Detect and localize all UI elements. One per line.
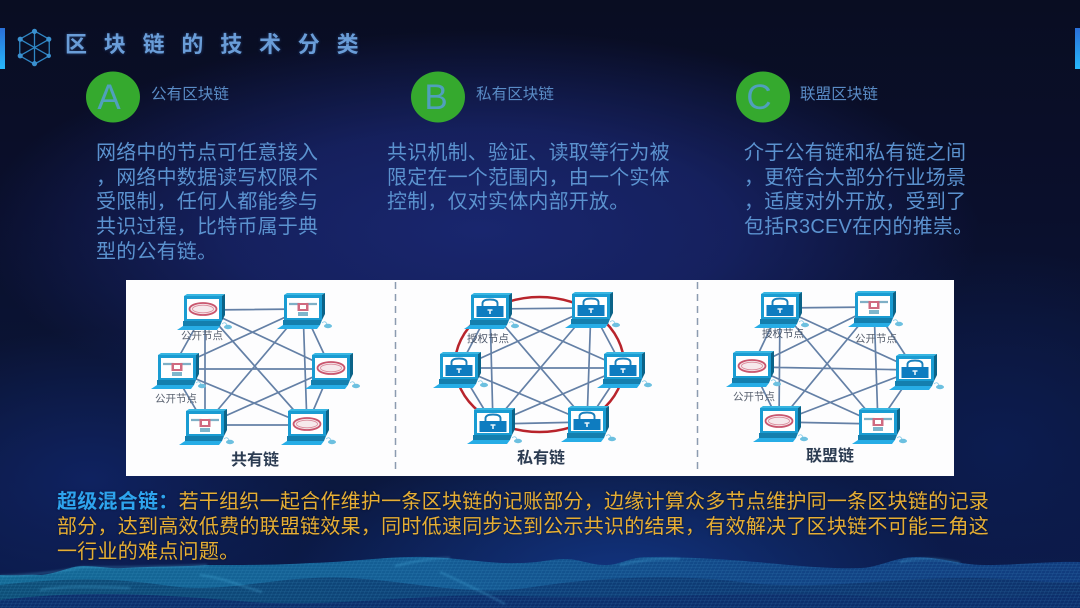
diagram: consortium chain: 公开节点 [733,391,775,403]
callout: super hybrid chain: 部分，达到高效低费的联盟链效果，同时低速同步达到公示共识的结果，有效解决了区块链不可能三角这 [57,516,989,538]
diagram: private chain [433,292,652,467]
text block: consortium chain: ，适度对外开放，受到了 [744,191,966,213]
text block: private chain: 控制，仅对实体内部开放。 [387,191,629,213]
text block: public chain: 受限制，任何人都能参与 [96,191,318,213]
text block: consortium chain [744,142,973,238]
text block: consortium chain: ，更符合大部分行业场景 [744,167,966,189]
badge B [411,72,465,122]
left accent bar [0,28,5,69]
badge A [86,72,140,122]
diagram: public chain: 公开节点 [181,330,223,342]
diagram: public chain: 公开节点 [155,393,197,405]
text block: private chain: 限定在一个范围内，由一个实体 [387,167,670,189]
diagram: public chain: 共有链 [231,450,279,469]
heading: private chain: 私有区块链 [476,86,554,103]
diagram: consortium chain [726,291,944,465]
text block: consortium chain: 介于公有链和私有链之间 [744,142,966,164]
badge C [736,72,790,122]
text block: public chain [96,142,318,263]
title: 区块链的技术分类 [65,32,375,57]
text block: public chain: 共识过程，比特币属于典 [96,216,318,238]
icon: blockchain cube [18,28,52,66]
text block: public chain: 网络中的节点可任意接入 [96,142,318,164]
callout: super hybrid chain [57,490,989,563]
badge C: C [746,78,772,117]
diagram: consortium chain: 联盟链 [806,446,854,465]
callout: super hybrid chain: 一行业的难点问题。 [57,541,239,563]
text block: public chain: ，网络中数据读写权限不 [96,167,318,189]
callout: super hybrid chain: 超级混合链：若干组织一起合作维护一条区块链的记账部分，边缘计算众多节点维护同一条区块链的记录 [57,491,989,513]
text block: private chain: 共识机制、验证、读取等行为被 [387,142,670,164]
heading: public chain: 公有区块链 [151,86,229,103]
diagram: private chain: 私有链 [517,448,565,467]
diagram: consortium chain: 公开节点 [855,333,897,345]
diagram: consortium chain: 授权节点 [762,327,804,340]
text block: private chain [387,142,670,213]
heading: consortium chain: 联盟区块链 [800,86,878,103]
wave landscape [0,556,1080,608]
diagram: private chain: 授权节点 [467,332,509,345]
badge A: A [97,78,121,117]
diagram: public chain [151,293,360,469]
text block: public chain: 型的公有链。 [96,241,217,263]
right accent bar [1075,28,1080,69]
badge B: B [424,78,448,117]
text block: consortium chain: 包括R3CEV在内的推崇。 [744,216,973,238]
panel: network diagrams [126,280,954,476]
